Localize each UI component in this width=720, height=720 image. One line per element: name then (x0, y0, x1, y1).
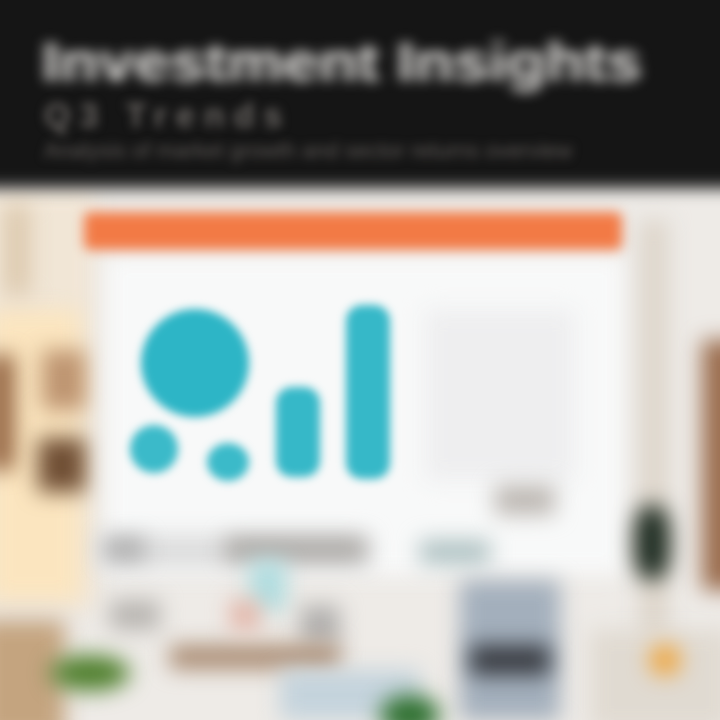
small circle middle (207, 443, 249, 481)
orange banner (84, 212, 622, 250)
header band background (0, 0, 720, 188)
left wall shelves (0, 190, 95, 610)
teal chart graphic (123, 298, 398, 488)
description text: Analysis of market growth and sector returns overview (44, 138, 572, 163)
small circle left (130, 425, 178, 473)
large circle (141, 309, 249, 417)
title: Investment Insights (42, 30, 641, 93)
plants (50, 655, 130, 691)
tall bar (346, 305, 390, 479)
header band (35, 30, 648, 164)
desks and floor (100, 535, 370, 567)
right wall and pillars (640, 220, 668, 640)
short bar (276, 387, 320, 477)
subtitle: Q3 Trends (44, 97, 291, 135)
background: blurred office interior (0, 180, 720, 720)
centre window (105, 255, 625, 575)
left floor (0, 620, 65, 720)
